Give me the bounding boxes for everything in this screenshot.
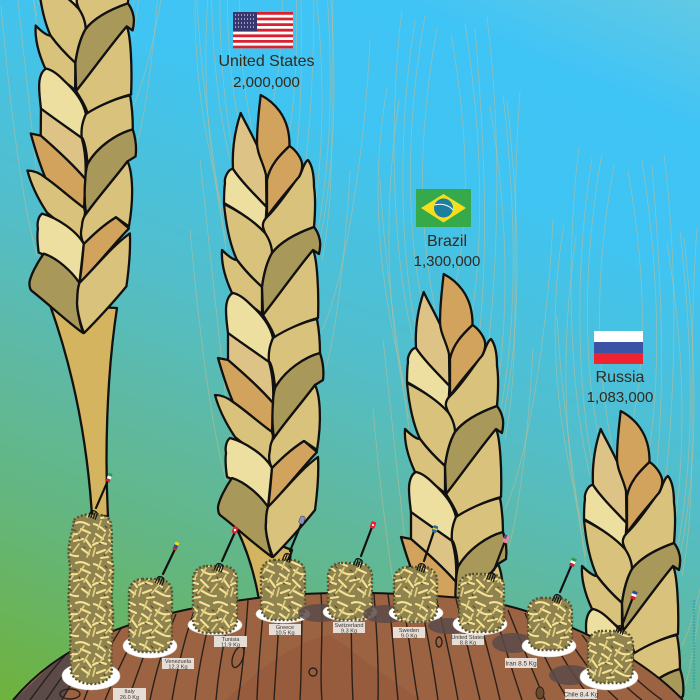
pasta stack: United States <box>428 534 510 646</box>
pasta stack: Tunisia: Tunisia <box>222 637 240 643</box>
pasta stack: Switzerland: 9.3 Kg <box>341 628 357 634</box>
pasta stack: Sweden: Sweden <box>399 628 419 634</box>
wheat ear: Brazil <box>398 274 506 647</box>
label: Russia production: Russia <box>596 369 645 386</box>
wheat ear: tallest, top of chart <box>26 0 138 516</box>
pasta stack: Sweden <box>363 525 443 640</box>
pasta stack: Venezuela: 12.3 Kg <box>168 664 188 670</box>
pasta stack: Tunisia <box>188 526 247 648</box>
pasta stack: Italy: Italy <box>124 689 135 695</box>
pasta stack: Greece <box>256 515 310 636</box>
pasta stack: Greece: Greece <box>276 625 294 631</box>
label: Brazil production <box>414 233 480 270</box>
pasta stack: Switzerland: Switzerland <box>335 623 363 629</box>
pasta stack: Chile: Chile 8.4 Kg <box>564 692 599 698</box>
label: Russia production: 1,083,000 <box>587 389 653 406</box>
pasta stack: Iran <box>492 557 577 668</box>
pasta stack: United States: United States <box>451 635 485 641</box>
wooden table <box>13 593 683 700</box>
pasta stack: Italy <box>62 473 146 700</box>
label: Russia production <box>587 369 653 406</box>
label: United States production <box>218 53 315 91</box>
pasta stack: Greece: 10.5 Kg <box>275 630 295 636</box>
pasta stack: Venezuela: Venezuela <box>165 659 192 665</box>
pasta stack: Iran: Iran 8.5 Kg <box>505 660 537 668</box>
flag: United States <box>233 12 293 48</box>
wheat ear: Russia <box>582 411 683 699</box>
flag: Russia <box>594 331 643 364</box>
flag: Brazil <box>416 189 471 227</box>
label: United States production: United States <box>218 53 315 70</box>
label: Brazil production: Brazil <box>427 233 467 250</box>
credit line along right edge <box>693 600 695 690</box>
pasta stack: Sweden: 9.0 Kg <box>401 634 417 640</box>
pasta stack: United States: 8.8 Kg <box>460 640 476 646</box>
wheat ear: United States <box>215 95 323 600</box>
pasta stack: Tunisia: 11.9 Kg <box>221 642 240 648</box>
pasta stack: Venezuela <box>123 542 194 670</box>
pasta stack: Switzerland <box>298 521 377 634</box>
label: United States production: 2,000,000 <box>233 74 300 91</box>
pasta stack: Chile <box>549 590 638 699</box>
label: Brazil production: 1,300,000 <box>414 253 480 270</box>
